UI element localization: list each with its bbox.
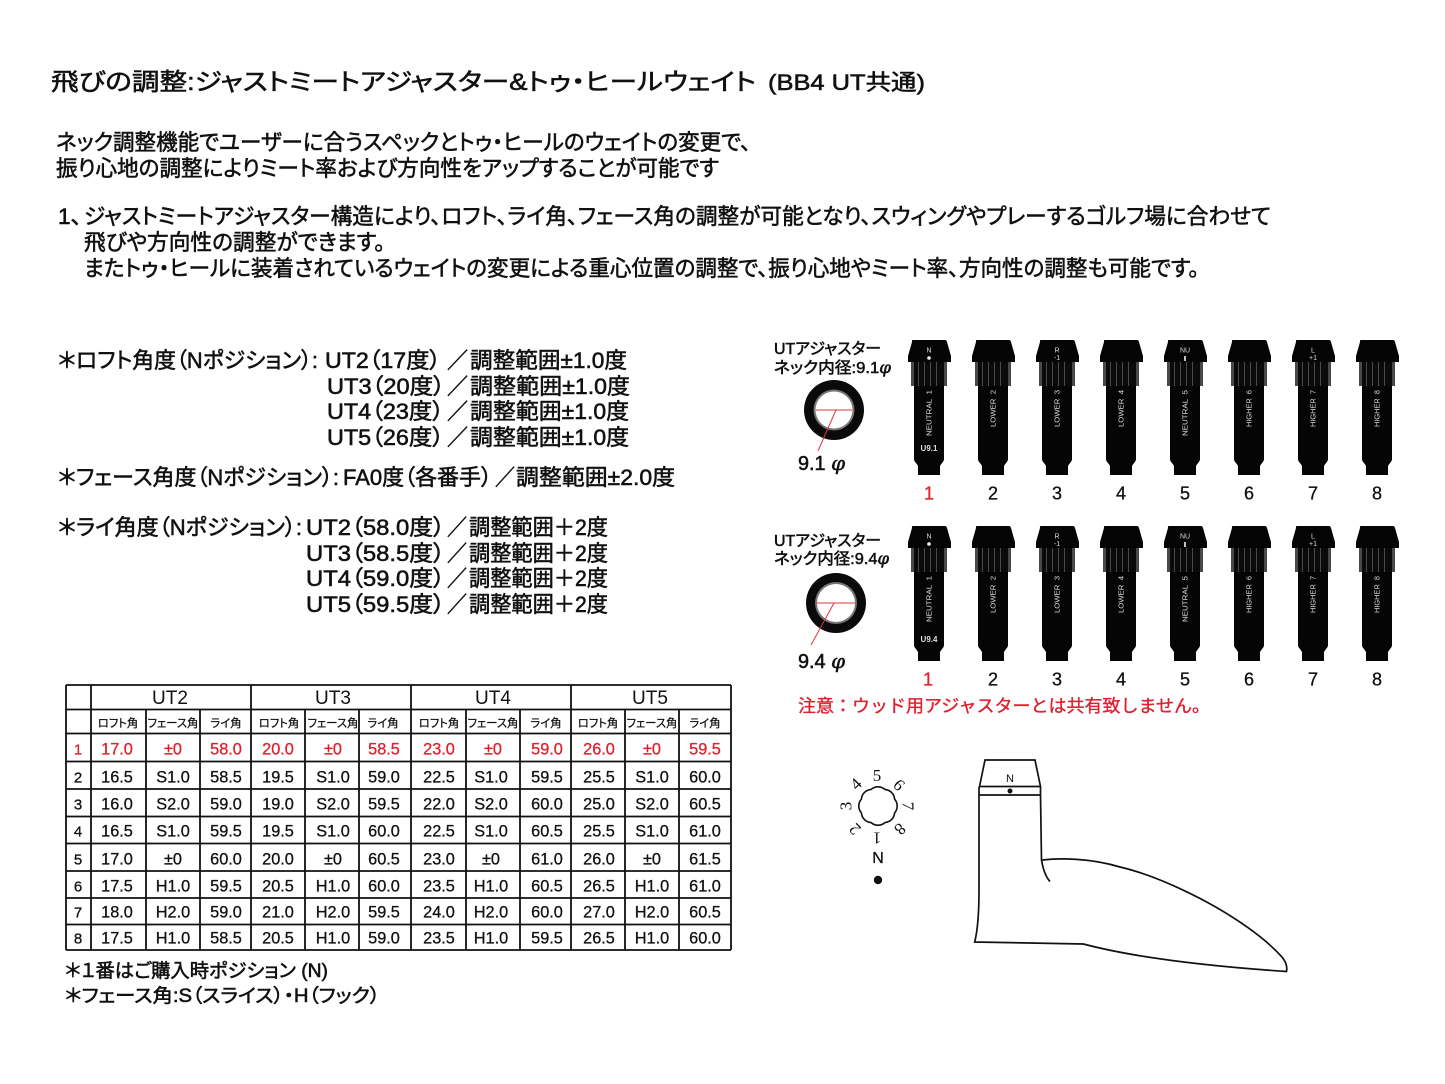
icon: position dial (836, 766, 918, 884)
row 3: 59.0 (210, 796, 242, 814)
adjuster 9.1 position 7 (1292, 340, 1335, 475)
adjuster 9.4 position 2: LOWER 2 (990, 576, 998, 613)
table footnotes (65, 960, 380, 1007)
row 5: ±0 (643, 850, 661, 868)
lie angle specs: ／ (447, 592, 467, 617)
loft angle specs: ／ (447, 425, 468, 450)
label: 9.1 adjuster (774, 340, 892, 377)
row 8: H1.0 (635, 930, 669, 948)
row 1 (74, 740, 721, 758)
row 8: 60.0 (689, 930, 721, 948)
loft angle specs: 調整範囲±1.0度 (470, 425, 629, 450)
row 8: 59.0 (368, 930, 400, 948)
lie angle specs: 調整範囲＋2度 (469, 515, 608, 540)
row 6: 59.5 (210, 878, 242, 896)
row 7: 27.0 (583, 904, 615, 922)
intro text: ネック調整機能でユーザーに合うスペックとトゥ・ヒールのウェイトの変更で、 (56, 130, 751, 155)
row 5: 26.0 (583, 850, 615, 868)
adjuster 9.1 position 2: LOWER 2 (990, 390, 998, 427)
row 5: 60.0 (210, 850, 242, 868)
adjuster 9.4 position 3: LOWER 3 (1054, 576, 1062, 613)
row 4: 4 (74, 824, 82, 840)
row 2 (74, 768, 721, 786)
row 8: H1.0 (474, 930, 508, 948)
adjuster 9.4 position 8: HIGHER 8 (1374, 576, 1382, 613)
table subheader: ライ角 (367, 717, 399, 730)
row 5: 20.0 (262, 850, 294, 868)
loft angle specs: 調整範囲±1.0度 (470, 399, 629, 424)
lie angle specs: 調整範囲＋2度 (469, 566, 608, 591)
adjuster 9.1 position 1: N (926, 348, 932, 354)
adjuster 9.1 position 6: HIGHER 6 (1246, 390, 1254, 427)
adjuster 9.4 position 2 (972, 526, 1015, 661)
row 6: 20.5 (262, 878, 294, 896)
table footnotes: ＊１番はご購入時ポジション (N) (65, 960, 328, 982)
row 8 (74, 930, 721, 948)
loft angle specs (58, 348, 630, 450)
row 4: 22.5 (423, 822, 455, 840)
lie angle specs: ／ (447, 541, 467, 566)
row 6: H1.0 (635, 878, 669, 896)
row 1: 20.0 (262, 740, 294, 758)
position numbers 9.4: 4 (1116, 670, 1126, 690)
row 2: S1.0 (635, 768, 669, 786)
illustration: club head: N (1006, 773, 1014, 785)
row 8: 20.5 (262, 930, 294, 948)
adjuster 9.4 position 8 (1356, 526, 1399, 661)
row 4: S1.0 (316, 822, 350, 840)
loft angle specs: ／ (447, 348, 468, 373)
adjuster 9.4 position 3: -1 (1054, 541, 1060, 548)
row 7: H2.0 (635, 904, 669, 922)
row 4: 61.0 (689, 822, 721, 840)
label: 9.1 diameter: 9.1 φ (798, 451, 845, 475)
adjuster 9.1 position 8 (1356, 340, 1399, 475)
row 5: 61.0 (531, 850, 563, 868)
row 1: 26.0 (583, 740, 615, 758)
numbered description: 飛びや方向性の調整ができます。 (84, 230, 385, 255)
adjuster 9.1 position 5: NU (1180, 348, 1190, 354)
adjuster 9.1 position 5 (1164, 340, 1207, 475)
row 1: ±0 (324, 740, 342, 758)
table header: models: UT3 (315, 688, 351, 709)
adjuster 9.1 position 3: -1 (1054, 355, 1060, 362)
table footnotes: ＊フェース角:S（スライス）・H（フック） (65, 985, 380, 1007)
adjuster 9.1 position 2 (972, 340, 1015, 475)
row 7 (74, 904, 721, 922)
table subheader: フェース角 (468, 717, 518, 730)
position numbers 9.4: 7 (1308, 670, 1318, 690)
row 4: 60.0 (368, 822, 400, 840)
row 4: S1.0 (635, 822, 669, 840)
row 1: 59.5 (689, 740, 721, 758)
adjuster 9.1 position 7: L (1311, 348, 1315, 354)
face angle specs (58, 465, 675, 490)
icon: position dial: 3 (836, 802, 856, 810)
row 5: 23.0 (423, 850, 455, 868)
row 6: 26.5 (583, 878, 615, 896)
row 7: 21.0 (262, 904, 294, 922)
adjuster 9.4 position 3 (1036, 526, 1079, 661)
row 1: ±0 (164, 740, 182, 758)
row 4: S1.0 (474, 822, 508, 840)
adjuster 9.1 position 7: HIGHER 7 (1310, 390, 1318, 427)
row 3 (74, 796, 721, 814)
table header: models: UT4 (475, 688, 511, 709)
row 3: 60.5 (689, 796, 721, 814)
adjuster 9.1 position 3: LOWER 3 (1054, 390, 1062, 427)
adjuster 9.1 position 3 (1036, 340, 1079, 475)
intro text: 振り心地の調整によりミート率および方向性をアップすることが可能です (56, 156, 719, 181)
icon: position dial: 1 (873, 828, 881, 848)
row 8: 59.5 (531, 930, 563, 948)
row 7: 59.5 (368, 904, 400, 922)
table header: models: UT2 (152, 688, 188, 709)
lie angle specs: UT2（58.0度） (306, 515, 445, 540)
adjuster 9.1 position 4 (1100, 340, 1143, 475)
adjuster 9.1 position 6 (1228, 340, 1271, 475)
loft angle specs: ／ (447, 399, 468, 424)
row 7: H2.0 (316, 904, 350, 922)
row 4: 16.5 (101, 822, 133, 840)
row 5: 60.5 (368, 850, 400, 868)
row 8: 23.5 (423, 930, 455, 948)
row 1: 23.0 (423, 740, 455, 758)
label: 9.4 adjuster: UTアジャスター (774, 532, 881, 550)
icon: 9.4 neck ring (806, 573, 866, 645)
numbered description: またトゥ・ヒールに装着されているウェイトの変更による重心位置の調整で、振り心地やミート率、方向性の調整も可能です。 (84, 256, 1199, 281)
lie angle specs: UT5（59.5度） (306, 592, 445, 617)
loft angle specs: UT4（23度） (327, 399, 444, 424)
row 2: 60.0 (689, 768, 721, 786)
row 2: 59.5 (531, 768, 563, 786)
row 3: 19.0 (262, 796, 294, 814)
lie angle specs: ＊ライ角度（Nポジション）: (58, 515, 302, 540)
table subheader: ライ角 (689, 717, 721, 730)
table subheader: ロフト角 (419, 717, 459, 730)
numbered description: 1、 (58, 204, 82, 229)
lie angle specs: UT3（58.5度） (306, 541, 445, 566)
row 3: S2.0 (156, 796, 190, 814)
position numbers 9.1: 8 (1372, 484, 1382, 504)
adjuster 9.4 position 6: HIGHER 6 (1246, 576, 1254, 613)
row 8: 17.5 (101, 930, 133, 948)
row 4: 60.5 (531, 822, 563, 840)
row 7: 60.5 (689, 904, 721, 922)
table subheader: フェース角 (148, 717, 198, 730)
label: 9.4 adjuster: ネック内径:9.4φ (774, 549, 890, 568)
position numbers 9.4: 1 (923, 670, 933, 690)
loft angle specs: UT2（17度） (325, 348, 441, 373)
adjuster 9.4 position 7: L (1311, 534, 1315, 540)
table subheader: フェース角 (308, 717, 358, 730)
row 1: 58.0 (210, 740, 242, 758)
label: 9.4 adjuster (774, 532, 890, 568)
row 5: ±0 (164, 850, 182, 868)
lie angle specs: ／ (447, 566, 467, 591)
label: 9.4 diameter: 9.4 φ (798, 649, 845, 673)
row 6: 60.5 (531, 878, 563, 896)
table subheader: ロフト角 (259, 717, 299, 730)
position numbers 9.4: 6 (1244, 670, 1254, 690)
row 7: 59.0 (210, 904, 242, 922)
row 1: 1 (74, 742, 82, 758)
row 6: 61.0 (689, 878, 721, 896)
adjuster 9.4 position 1 (908, 526, 951, 661)
icon: position dial: 2 (845, 819, 865, 839)
row 6: H1.0 (156, 878, 190, 896)
lie angle specs: ／ (447, 515, 467, 540)
icon: 9.1 neck ring (804, 380, 864, 451)
row 1: 58.5 (368, 740, 400, 758)
row 8: 26.5 (583, 930, 615, 948)
row 3: S2.0 (635, 796, 669, 814)
row 7: 18.0 (101, 904, 133, 922)
position numbers 9.4 (923, 670, 1382, 690)
icon: position dial: 5 (873, 766, 881, 785)
adjuster 9.4 position 1: N (926, 534, 932, 540)
adjuster 9.4 position 5: NU (1180, 534, 1190, 540)
row 6: H1.0 (316, 878, 350, 896)
position numbers 9.1: 1 (924, 484, 934, 504)
row 5: 5 (74, 852, 82, 868)
row 3: 60.0 (531, 796, 563, 814)
row 6: 6 (74, 878, 82, 896)
row 1: 17.0 (101, 740, 133, 758)
row 5 (74, 850, 721, 868)
lie angle specs: UT4（59.0度） (306, 566, 445, 591)
icon: position dial: 8 (890, 819, 910, 839)
row 8: 8 (74, 930, 82, 948)
adjuster 9.1 position 1: U9.1 (921, 444, 938, 453)
table header: models (152, 688, 668, 709)
caution note: 注意：ウッド用アジャスターとは共有致しません。 (798, 696, 1210, 716)
row 6: H1.0 (474, 878, 508, 896)
row 1: ±0 (484, 740, 502, 758)
loft angle specs: ／ (447, 374, 468, 399)
adjuster 9.4 position 7: +1 (1309, 541, 1317, 548)
position numbers 9.4: 3 (1052, 670, 1062, 690)
adjuster 9.4 position 4: LOWER 4 (1118, 576, 1126, 613)
row 7: H2.0 (474, 904, 508, 922)
row 4: S1.0 (156, 822, 190, 840)
row 2: S1.0 (474, 768, 508, 786)
row 7: 24.0 (423, 904, 455, 922)
position numbers 9.4: 5 (1180, 670, 1190, 690)
title: 飛びの調整:ジャストミートアジャスター&トゥ・ヒールウェイト (51, 69, 756, 96)
adjuster 9.4 position 1: U9.4 (921, 635, 938, 644)
numbered description (58, 204, 1271, 281)
row 3: S2.0 (316, 796, 350, 814)
row 4: 25.5 (583, 822, 615, 840)
position numbers 9.1: 4 (1116, 484, 1126, 504)
row 7: 60.0 (531, 904, 563, 922)
row 2: 59.0 (368, 768, 400, 786)
table subheader: ライ角 (530, 717, 562, 730)
lie angle specs (58, 515, 608, 617)
row 3: 59.5 (368, 796, 400, 814)
icon: position dial: 6 (889, 775, 909, 795)
adjuster 9.4 position 5: NEUTRAL 5 (1182, 576, 1190, 622)
lie angle specs: 調整範囲＋2度 (469, 541, 608, 566)
face angle specs: ／ (495, 465, 515, 490)
table header: models: UT5 (632, 688, 668, 709)
row 3: S2.0 (474, 796, 508, 814)
position numbers 9.4: 2 (988, 670, 998, 690)
icon: position dial: N (872, 850, 884, 867)
loft angle specs: ＊ロフト角度（Nポジション）: (58, 348, 318, 373)
row 5: ±0 (324, 850, 342, 868)
row 2: S1.0 (316, 768, 350, 786)
adjuster 9.1 position 4: LOWER 4 (1118, 390, 1126, 427)
row 4: 19.5 (262, 822, 294, 840)
adjuster 9.1 position 1: NEUTRAL 1 (926, 390, 934, 436)
adjuster 9.1 position 3: R (1054, 348, 1060, 354)
position numbers 9.1: 5 (1180, 484, 1190, 504)
intro text (56, 130, 751, 181)
position numbers 9.1: 2 (988, 484, 998, 504)
face angle specs: FA0度（各番手） (343, 465, 492, 490)
row 4: 59.5 (210, 822, 242, 840)
face angle specs: ＊フェース角度（Nポジション）: (58, 465, 339, 490)
position numbers 9.4: 8 (1372, 670, 1382, 690)
icon: position dial: 4 (846, 774, 866, 794)
label: 9.1 adjuster: ネック内径:9.1 φ (774, 358, 892, 377)
row 8: H1.0 (156, 930, 190, 948)
face angle specs: 調整範囲±2.0度 (516, 465, 675, 490)
illustration: club head (975, 760, 1287, 972)
adjuster 9.1 position 1 (908, 340, 951, 475)
adjuster 9.4 position 4 (1100, 526, 1143, 661)
adjuster 9.4 position 1: NEUTRAL 1 (926, 576, 934, 622)
loft angle specs: 調整範囲±1.0度 (470, 374, 630, 399)
position numbers 9.1 (924, 484, 1382, 504)
row 2: 58.5 (210, 768, 242, 786)
loft angle specs: UT5（26度） (327, 425, 444, 450)
row 2: 25.5 (583, 768, 615, 786)
label: 9.1 adjuster: UTアジャスター (774, 340, 881, 358)
adjuster 9.1 position 5: NEUTRAL 5 (1182, 390, 1190, 436)
table subheader: ロフト角 (578, 717, 618, 730)
row 7: 7 (74, 904, 82, 922)
row 5: ±0 (482, 850, 500, 868)
icon: position dial: 7 (898, 802, 918, 811)
adjuster 9.4 position 7: HIGHER 7 (1310, 576, 1318, 613)
loft angle specs: 調整範囲±1.0度 (470, 348, 627, 373)
row 1: 59.0 (531, 740, 563, 758)
position numbers 9.1: 7 (1308, 484, 1318, 504)
row 2: S1.0 (156, 768, 190, 786)
lie angle specs: 調整範囲＋2度 (469, 592, 608, 617)
table subheader: フェース角 (627, 717, 677, 730)
row 3: 25.0 (583, 796, 615, 814)
row 2: 2 (74, 770, 82, 786)
row 6: 23.5 (423, 878, 455, 896)
row 1: ±0 (643, 740, 661, 758)
row 3: 3 (74, 796, 82, 814)
table subheader: ロフト角 (98, 717, 138, 730)
adjuster 9.4 position 6 (1228, 526, 1271, 661)
title: (BB4 UT共通) (768, 70, 925, 95)
adjuster 9.4 position 5 (1164, 526, 1207, 661)
row 4 (74, 822, 721, 840)
position numbers 9.1: 6 (1244, 484, 1254, 504)
row 3: 22.0 (423, 796, 455, 814)
adjuster 9.4 position 7 (1292, 526, 1335, 661)
row 2: 19.5 (262, 768, 294, 786)
adjuster 9.1 position 8: HIGHER 8 (1374, 390, 1382, 427)
row 6 (74, 878, 721, 896)
adjuster table (66, 685, 731, 950)
row 8: 58.5 (210, 930, 242, 948)
adjuster 9.4 position 3: R (1054, 534, 1060, 540)
numbered description: ジャストミートアジャスター構造により、ロフト、ライ角、フェース角の調整が可能となり、スウィングやプレーするゴルフ場に合わせて (84, 204, 1271, 229)
row 6: 60.0 (368, 878, 400, 896)
row 7: H2.0 (156, 904, 190, 922)
loft angle specs: UT3（20度） (327, 374, 445, 399)
row 5: 17.0 (101, 850, 133, 868)
row 6: 17.5 (101, 878, 133, 896)
position numbers 9.1: 3 (1052, 484, 1062, 504)
row 8: H1.0 (316, 930, 350, 948)
row 5: 61.5 (689, 850, 721, 868)
table subheader: ライ角 (210, 717, 242, 730)
row 2: 16.5 (101, 768, 133, 786)
row 2: 22.5 (423, 768, 455, 786)
adjuster 9.1 position 7: +1 (1309, 355, 1317, 362)
table subheader (98, 717, 721, 730)
row 3: 16.0 (101, 796, 133, 814)
